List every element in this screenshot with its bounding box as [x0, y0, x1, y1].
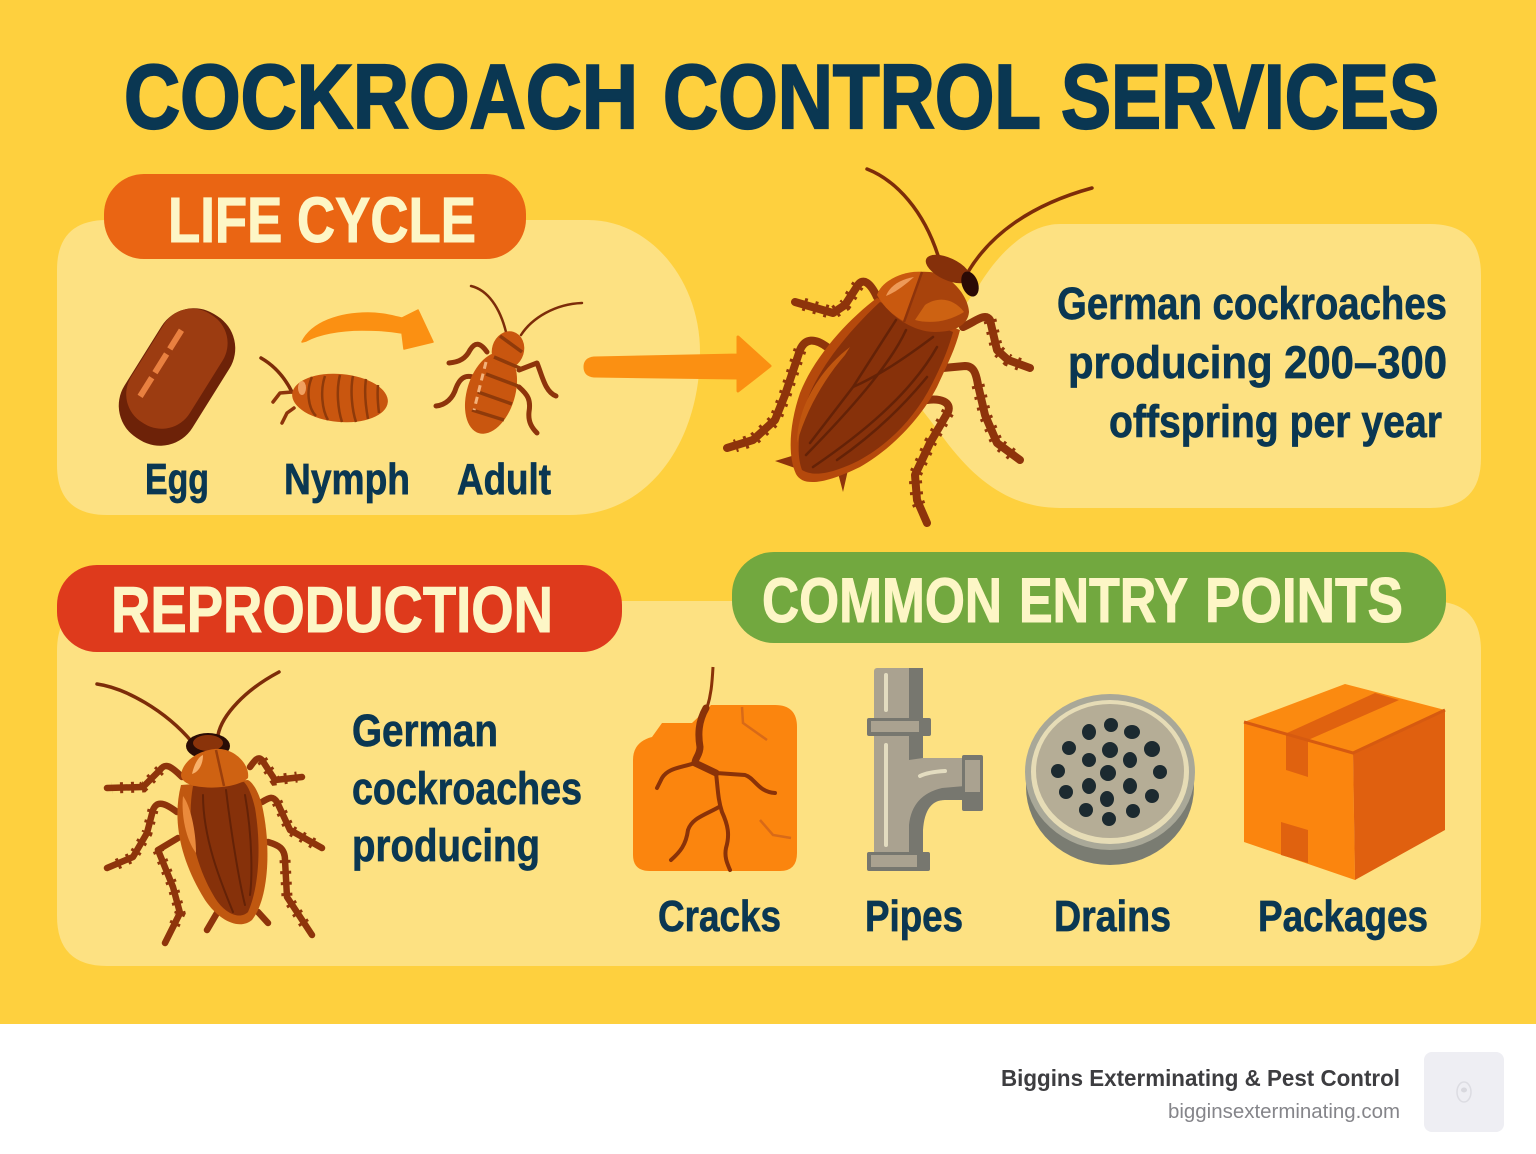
heading: reproduction: REPRODUCTION [111, 573, 553, 646]
text: offspring fact: offspring per year [1109, 396, 1442, 447]
text: offspring fact: producing 200–300 [1068, 337, 1447, 388]
icon: drains [1025, 694, 1195, 865]
icon: large cockroach [727, 169, 1092, 523]
arrow: life cycle to cockroach [585, 337, 770, 391]
label: drains: Drains [1054, 892, 1171, 941]
icon: packages [1244, 684, 1445, 880]
text: offspring fact: German cockroaches [1057, 278, 1447, 329]
text: offspring fact [1057, 278, 1447, 447]
title: CONTROL [663, 47, 1041, 148]
label: cracks: Cracks [658, 892, 781, 941]
title: SERVICES [1061, 47, 1439, 148]
label: egg: Egg [145, 455, 209, 504]
arrow: nymph to adult [302, 310, 433, 349]
icon: adult [436, 286, 582, 440]
icon: egg [104, 294, 250, 460]
label: packages: Packages [1258, 892, 1428, 941]
heading: common entry points: COMMON [762, 566, 1002, 636]
icon: pipes [867, 668, 983, 871]
heading: common entry points [732, 552, 1446, 643]
panel: reproduction and entry points [57, 552, 1481, 966]
brand logo tile [1424, 1052, 1504, 1132]
label: adult: Adult [457, 455, 551, 504]
heading: life cycle: LIFE CYCLE [168, 184, 476, 256]
footer brand [1001, 1052, 1504, 1132]
icon: cockroach top view [97, 672, 322, 943]
title [124, 47, 1439, 148]
heading: common entry points: POINTS [1205, 566, 1403, 636]
panel: life cycle [57, 174, 700, 515]
text: german cockroaches producing: cockroaches [352, 763, 582, 814]
brand url: bigginsexterminating.com [1168, 1101, 1400, 1123]
label: nymph: Nymph [284, 455, 410, 504]
text: german cockroaches producing [352, 705, 582, 871]
brand name: Biggins Exterminating & Pest Control [1001, 1065, 1400, 1091]
icon: cracks [633, 667, 797, 871]
text: german cockroaches producing: producing [352, 820, 540, 871]
heading: life cycle [104, 174, 526, 259]
icon: nymph [261, 358, 390, 426]
title: COCKROACH [124, 47, 638, 148]
label: pipes: Pipes [865, 892, 963, 941]
heading: common entry points: ENTRY [1019, 566, 1188, 636]
panel: offspring fact [905, 224, 1481, 508]
text: german cockroaches producing: German [352, 705, 498, 756]
